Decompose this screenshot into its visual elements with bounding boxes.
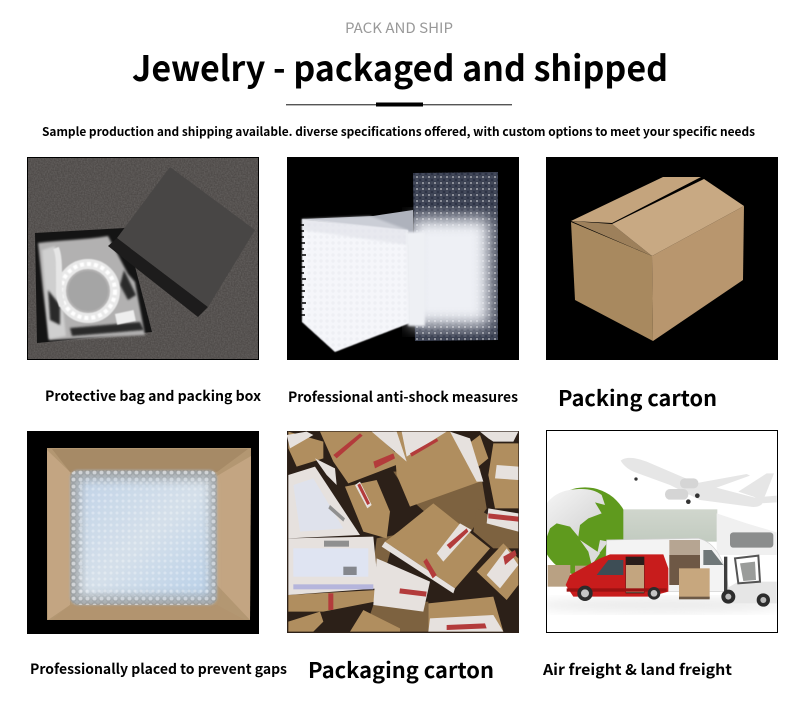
right face bbox=[652, 206, 744, 341]
box lid side bbox=[108, 238, 208, 317]
title divider bbox=[286, 102, 512, 106]
cardboard boxes behind vans bbox=[548, 565, 587, 587]
panel border bbox=[28, 158, 258, 360]
white van bbox=[605, 538, 728, 592]
caption: prevent gaps: Professionally placed to prevent gaps bbox=[30, 659, 287, 679]
front flap bbox=[612, 179, 744, 256]
stacked bubble bags bbox=[302, 210, 413, 234]
panel: air and land freight photo bbox=[535, 430, 785, 633]
panel: pile of shipping cartons photo bbox=[287, 431, 519, 633]
back bubble sheet bbox=[413, 172, 498, 341]
caption: packaging carton: Packaging carton bbox=[308, 654, 494, 685]
panel: protective bag and packing box photo bbox=[27, 157, 259, 360]
carton outer walls bbox=[47, 448, 251, 620]
panel border bbox=[546, 430, 778, 632]
green globe bbox=[547, 487, 624, 574]
red van bbox=[566, 554, 668, 597]
cartons bbox=[288, 432, 518, 632]
white tape and shipping labels bbox=[287, 432, 518, 632]
pallet of boxes bbox=[679, 568, 710, 598]
red tape marks bbox=[328, 433, 518, 630]
background cartons bbox=[370, 468, 518, 632]
caption: air and land freight: Air freight & land freight bbox=[542, 659, 733, 680]
truck box bbox=[623, 509, 717, 542]
stack layered edge bbox=[300, 225, 306, 315]
clear bag bbox=[38, 236, 145, 340]
title: Jewelry - packaged and shipped bbox=[132, 41, 668, 92]
silver chain bbox=[56, 248, 136, 325]
left face bbox=[571, 222, 653, 341]
carton interior bbox=[571, 221, 652, 256]
truck cab bbox=[717, 513, 777, 555]
caption: anti-shock: Professional anti-shock measures bbox=[288, 387, 518, 407]
caption: packing carton: Packing carton bbox=[558, 382, 717, 413]
panel: bubble wrap bags photo bbox=[287, 157, 519, 360]
subtitle: Sample production and shipping available. diverse specifications offered, with custom options to meet your specific needs bbox=[42, 123, 755, 140]
caption: protective bag: Protective bag and packing box bbox=[45, 386, 261, 406]
forklift bbox=[721, 556, 777, 607]
label detail bbox=[293, 548, 368, 577]
box lid top bbox=[117, 167, 255, 307]
open box base bbox=[35, 228, 152, 343]
eyebrow heading: PACK AND SHIP bbox=[345, 17, 453, 38]
panel: product placed in carton photo bbox=[27, 431, 259, 634]
back flap bbox=[571, 177, 701, 223]
bubble-wrapped item bbox=[70, 470, 217, 605]
panel: cardboard carton photo bbox=[546, 157, 778, 360]
airplane bbox=[621, 458, 777, 507]
